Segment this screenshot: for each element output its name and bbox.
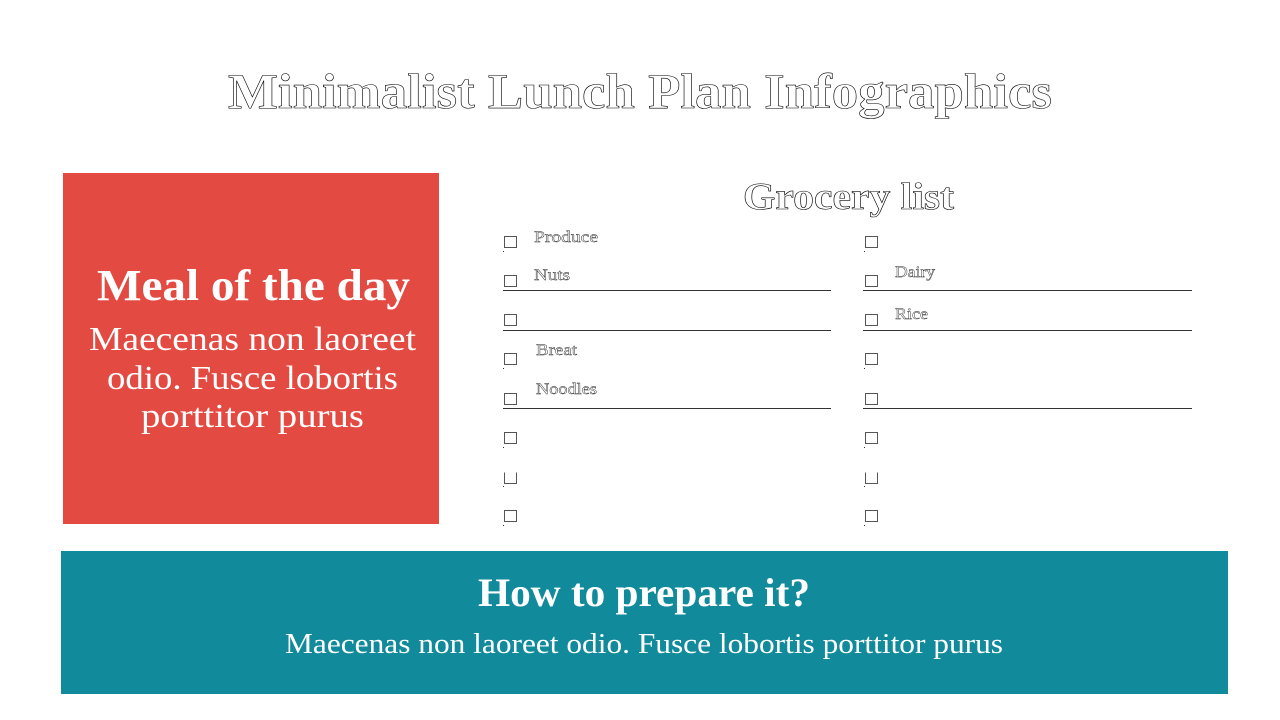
- item labels: left column: Breat: [536, 342, 578, 359]
- item labels: right column: Dairy: [895, 264, 935, 281]
- checkboxes: right column: [866, 236, 878, 522]
- item labels: left column: Noodles: [536, 381, 597, 398]
- rule lines: left column: [503, 290, 831, 408]
- panel: grocery list left column: [503, 229, 831, 526]
- title: Minimalist Lunch Plan Infographics: [228, 63, 1052, 119]
- checkbox corner marks: right column: [864, 251, 865, 526]
- text block: meal description: [89, 321, 417, 435]
- item labels: left column: Produce: [534, 229, 598, 246]
- panel: grocery list right column: [863, 236, 1192, 526]
- panel: meal of the day: [63, 173, 439, 524]
- item labels: right column: Rice: [895, 306, 928, 323]
- rule lines: right column: [863, 290, 1192, 408]
- text block: meal description: Maecenas non laoreet: [89, 321, 417, 358]
- heading: meal of the day: Meal of the day: [97, 261, 410, 310]
- item labels: left column: [534, 229, 598, 398]
- checkbox corner marks: left column: [503, 251, 504, 526]
- text block: meal description: odio. Fusce lobortis: [107, 360, 398, 397]
- item labels: left column: Nuts: [534, 267, 570, 284]
- text block: meal description: porttitor purus: [141, 398, 364, 435]
- panel: how to prepare it: [61, 551, 1228, 694]
- checkboxes: left column: [504, 236, 516, 522]
- heading: grocery list: Grocery list: [743, 176, 954, 218]
- item labels: right column: [895, 264, 935, 323]
- heading: how to prepare it: How to prepare it?: [478, 570, 810, 615]
- text block: preparation description: Maecenas non laoreet odio. Fusce lobortis porttitor purus: [285, 628, 1003, 660]
